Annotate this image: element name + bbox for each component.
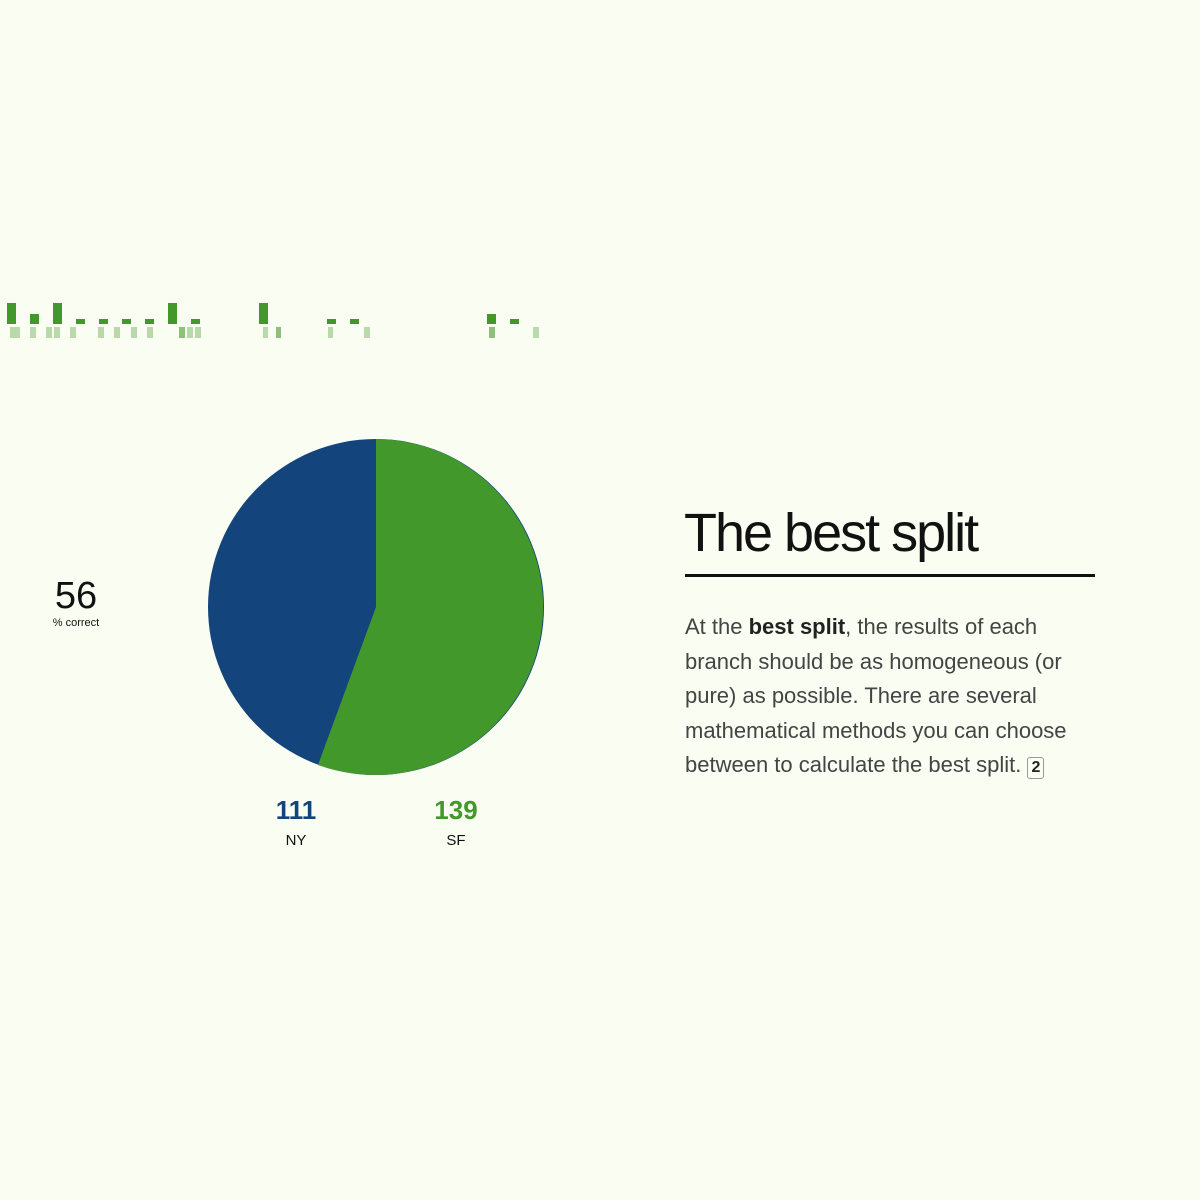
label: SF: SF <box>446 832 466 849</box>
label: SF <box>434 795 478 849</box>
bar strip <box>7 303 539 338</box>
paragraph: mathematical methods you can choose <box>685 718 1067 742</box>
title underline <box>685 574 1095 577</box>
label: NY: NY <box>286 832 306 849</box>
title: The best split <box>684 503 977 563</box>
paragraph: between to calculate the best split. <box>685 752 1021 777</box>
accuracy stat: % correct <box>53 617 99 629</box>
paragraph: 2 <box>1031 759 1040 776</box>
paragraph: At the best split, the results of each <box>685 614 1037 639</box>
paragraph: pure) as possible. There are several <box>685 683 1037 708</box>
paragraph: branch should be as homogeneous (or <box>685 648 1062 674</box>
paragraph <box>685 614 1067 779</box>
label: NY <box>276 795 316 849</box>
pie chart <box>208 439 544 775</box>
accuracy stat: 56 <box>55 575 97 617</box>
label: SF: 139 <box>434 795 478 825</box>
label: NY: 111 <box>276 795 316 825</box>
